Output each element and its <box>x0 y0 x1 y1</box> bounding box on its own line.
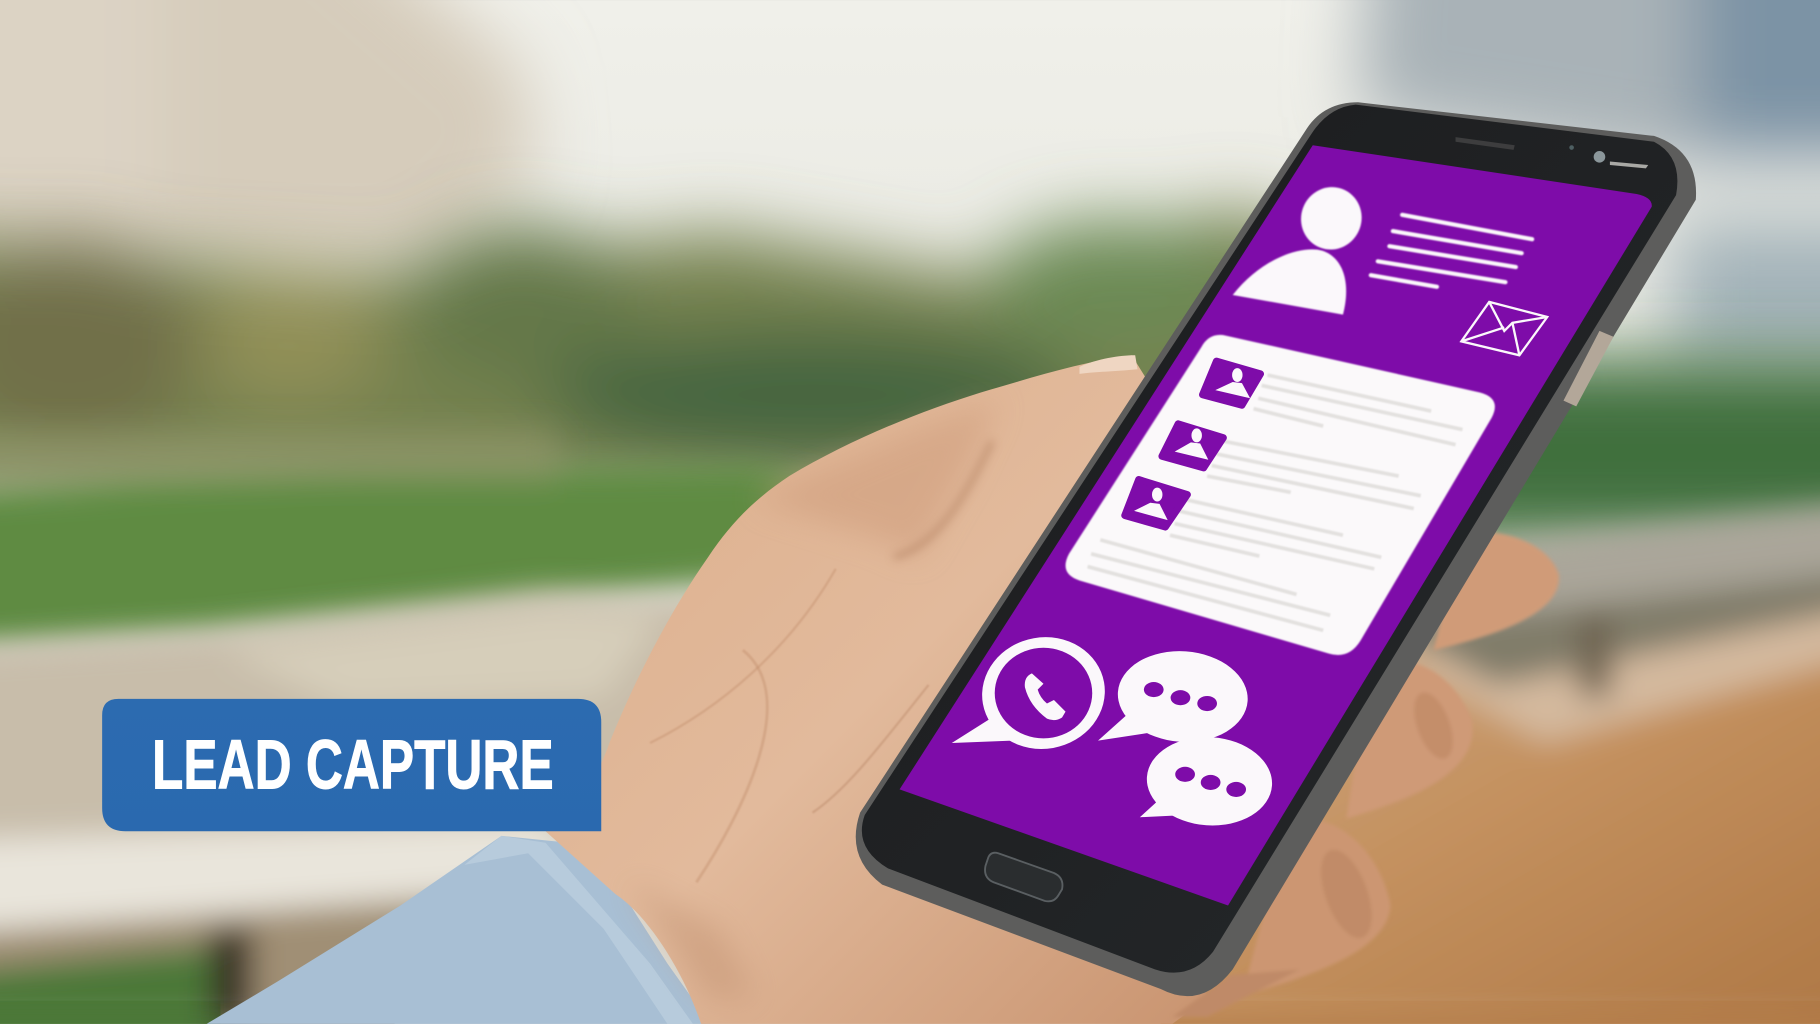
icon: speech bubble 1 <box>1098 647 1251 746</box>
contact text lines <box>1088 375 1462 630</box>
phone bezel <box>862 105 1677 973</box>
icon: envelope <box>1461 302 1547 355</box>
icon: contact 2 <box>1162 424 1223 468</box>
hand: palm and thumb <box>546 355 1207 1024</box>
phone <box>856 102 1696 996</box>
icon: home button <box>985 853 1062 901</box>
phone screen <box>900 145 1652 905</box>
icon: contact 3 <box>1125 480 1187 527</box>
icon: side button <box>1563 331 1613 406</box>
icon: contact 1 <box>1202 361 1261 405</box>
contact card <box>1066 335 1495 655</box>
icon: speech bubble 2 <box>1140 733 1275 830</box>
badge title: LEAD CAPTURE <box>152 725 554 803</box>
icon: profile avatar <box>1233 179 1370 315</box>
sleeve: denim cuff <box>207 836 710 1024</box>
profile text lines <box>1371 215 1532 287</box>
earpiece and camera <box>1456 137 1648 168</box>
phone body: metal frame <box>856 102 1696 996</box>
icon: phone chat bubble <box>952 628 1114 759</box>
fingers behind phone <box>1172 531 1559 1017</box>
badge: lead capture <box>102 699 601 831</box>
